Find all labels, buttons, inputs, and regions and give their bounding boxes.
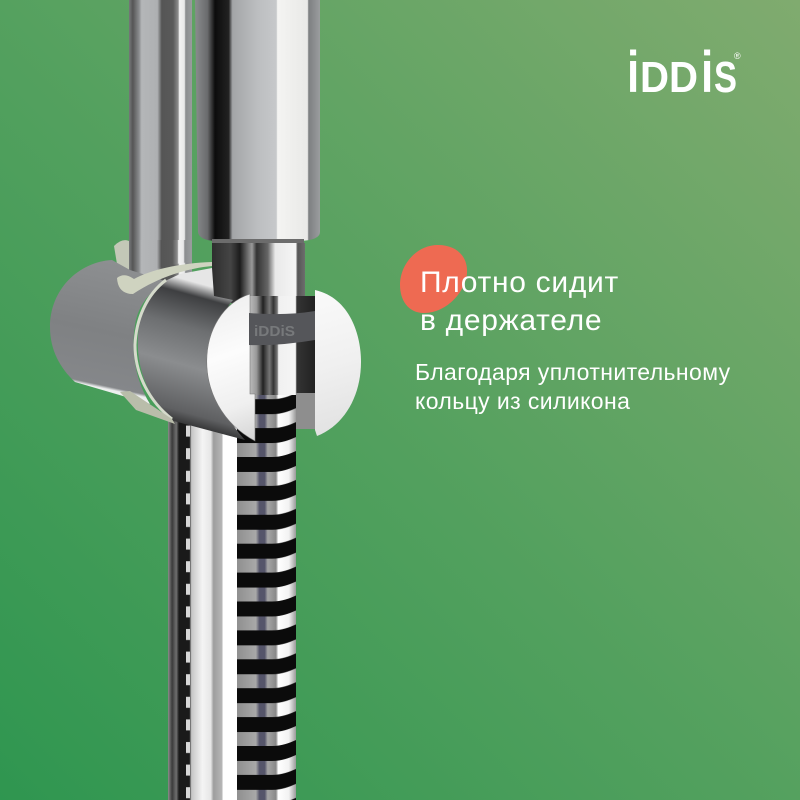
notch beside the hose <box>296 393 316 429</box>
right chrome disc <box>315 290 361 436</box>
brand logo: ® <box>734 51 741 61</box>
left chrome disc <box>207 294 255 441</box>
brand logo <box>627 39 741 104</box>
grey cylinder left part <box>50 260 165 404</box>
shower rail upper section <box>129 0 192 290</box>
handle collar <box>212 239 305 303</box>
shower handle <box>195 0 320 241</box>
holder button <box>114 240 129 272</box>
silicone band with logo: iDDiS <box>254 324 295 340</box>
grey cylinder right part <box>138 268 245 440</box>
silicone ring lower tab <box>120 391 175 424</box>
red accent blob <box>400 245 467 313</box>
heading: Плотно сидит <box>420 266 619 299</box>
hose with striped spiral <box>237 395 296 800</box>
rail passing through the holder <box>129 240 191 278</box>
silicone ring <box>135 280 172 419</box>
silicone band with logo <box>249 311 315 345</box>
heading: в держателе <box>420 304 602 337</box>
connector below the silicone ring <box>250 296 315 396</box>
holder clamp <box>50 240 361 441</box>
brand logo: i <box>627 39 639 104</box>
brand logo: i <box>701 39 713 104</box>
brand logo: S <box>714 53 737 102</box>
shower rail lower section <box>168 400 237 800</box>
description: Благодаря уплотнительному <box>415 359 731 385</box>
silicone gasket around rail <box>117 262 212 294</box>
description: кольцу из силикона <box>415 388 630 414</box>
brand logo: DD <box>640 53 698 102</box>
